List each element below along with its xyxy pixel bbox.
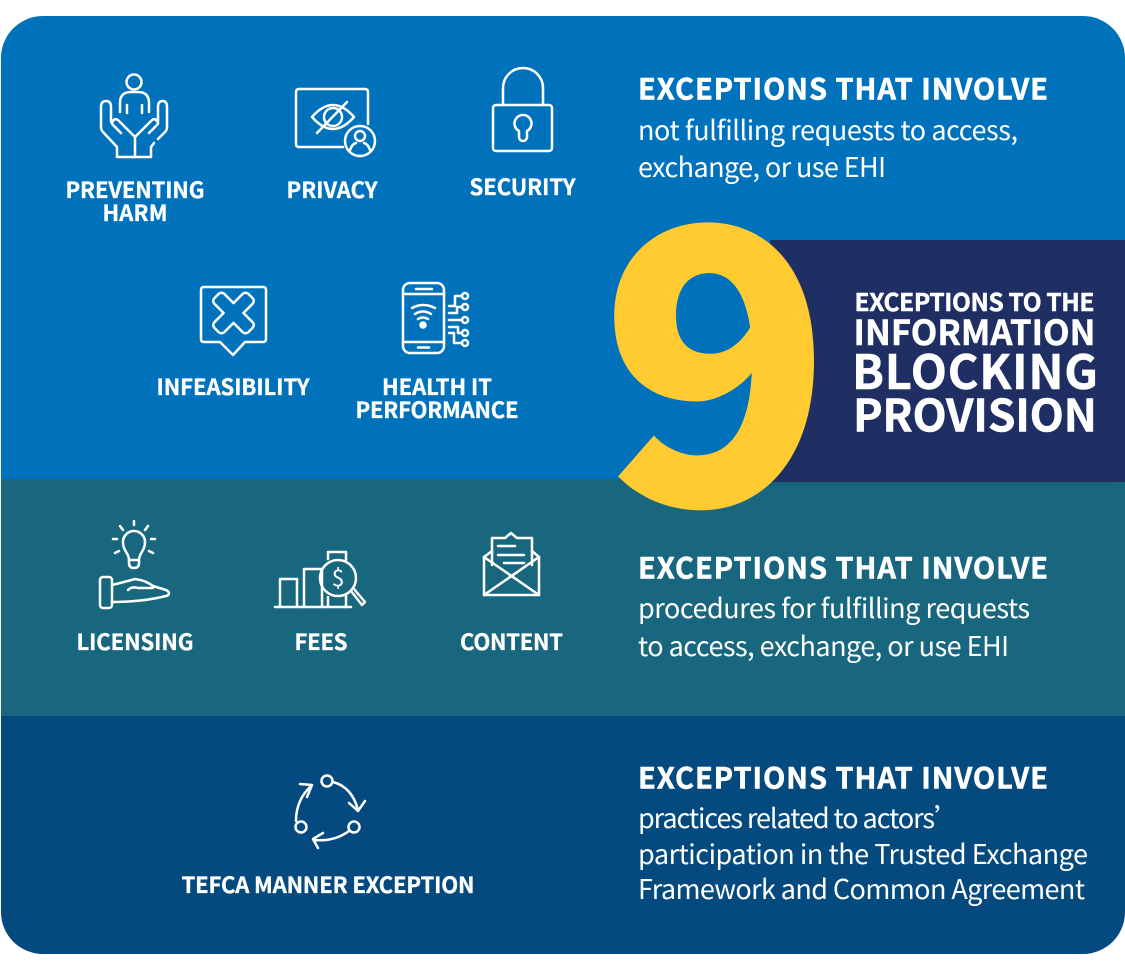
label: fees: FEES: [294, 625, 348, 657]
label: health IT performance: [356, 370, 518, 425]
panel: navy title banner: [770, 240, 1125, 486]
panel: dark blue section: [0, 716, 1125, 954]
banner title: [852, 284, 1098, 444]
label: privacy: PRIVACY: [286, 173, 378, 205]
banner title: BLOCKING: [852, 334, 1098, 403]
label: preventing harm: PREVENTING: [66, 173, 204, 205]
text block: exceptions TEFCA: practices related to actors’: [638, 797, 961, 836]
label: security: SECURITY: [470, 170, 576, 202]
big number 9: 9: [600, 63, 832, 616]
icon: privacy: [296, 89, 375, 156]
icon: fees: [275, 552, 365, 607]
icon: infeasibility: [200, 279, 267, 355]
banner title: EXCEPTIONS TO THE: [854, 284, 1094, 319]
text block: exceptions not fulfilling: [638, 67, 1048, 185]
text block: exceptions not fulfilling: not fulfilling requests to access,: [638, 109, 1018, 148]
text block: exceptions TEFCA: Framework and Common Agreement: [638, 868, 1085, 907]
text block: exceptions procedures: EXCEPTIONS THAT INVOLVE: [638, 546, 1048, 588]
text block: exceptions procedures: [638, 546, 1048, 664]
banner title: INFORMATION: [854, 305, 1096, 355]
icon: health IT performance: [403, 283, 468, 353]
label: content: CONTENT: [460, 625, 563, 657]
label: TEFCA manner exception: TEFCA MANNER EXCEPTION: [182, 868, 474, 900]
label: health IT performance: HEALTH IT: [382, 370, 492, 402]
text block: exceptions TEFCA: [638, 756, 1088, 907]
icon: security padlock: [493, 68, 552, 151]
label: licensing: LICENSING: [76, 625, 194, 657]
text block: exceptions TEFCA: EXCEPTIONS THAT INVOLVE: [638, 756, 1048, 798]
text block: exceptions not fulfilling: EXCEPTIONS THAT INVOLVE: [638, 67, 1048, 109]
label: infeasibility: INFEASIBILITY: [156, 370, 310, 402]
text block: exceptions procedures: procedures for fulfilling requests: [638, 587, 1030, 626]
banner title: PROVISION: [853, 380, 1097, 444]
label: preventing harm: HARM: [102, 196, 168, 228]
icon: TEFCA cycle arrows: [296, 776, 365, 848]
icon: licensing: [100, 521, 169, 608]
text block: exceptions TEFCA: participation in the Trusted Exchange: [638, 833, 1088, 872]
label: preventing harm: [66, 173, 204, 228]
icon: fees: $: [332, 559, 344, 593]
text block: exceptions procedures: to access, exchange, or use EHI: [638, 625, 1009, 664]
panel: blue section: [0, 16, 1125, 479]
icon: preventing harm: [101, 74, 167, 157]
panel: teal section: [0, 479, 1125, 716]
icon: content envelope: [484, 533, 539, 595]
text block: exceptions not fulfilling: exchange, or use EHI: [638, 146, 886, 185]
label: health IT performance: PERFORMANCE: [356, 393, 518, 425]
